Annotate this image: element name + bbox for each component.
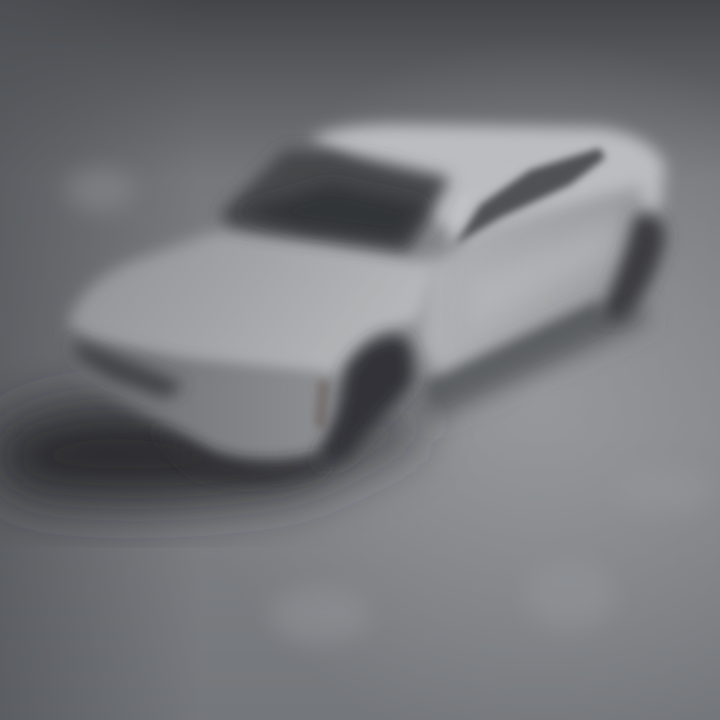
car shadow (0, 295, 650, 504)
car (66, 125, 665, 480)
floor highlights (65, 168, 715, 643)
windshield dark core (240, 185, 425, 240)
side windows (455, 148, 605, 245)
car side panel (420, 185, 650, 380)
rear wheel (598, 214, 665, 320)
windshield (222, 150, 450, 252)
headlight amber reflection (314, 380, 330, 430)
front grille (72, 340, 185, 398)
roof pillar highlight (445, 160, 520, 250)
bumper lower edge (150, 425, 330, 480)
car front bumper (66, 335, 345, 462)
front wheel (315, 335, 414, 465)
side panel highlight (470, 215, 620, 330)
car hood (68, 228, 440, 380)
sill shadow (425, 300, 605, 398)
car roof and rear deck (310, 125, 665, 250)
